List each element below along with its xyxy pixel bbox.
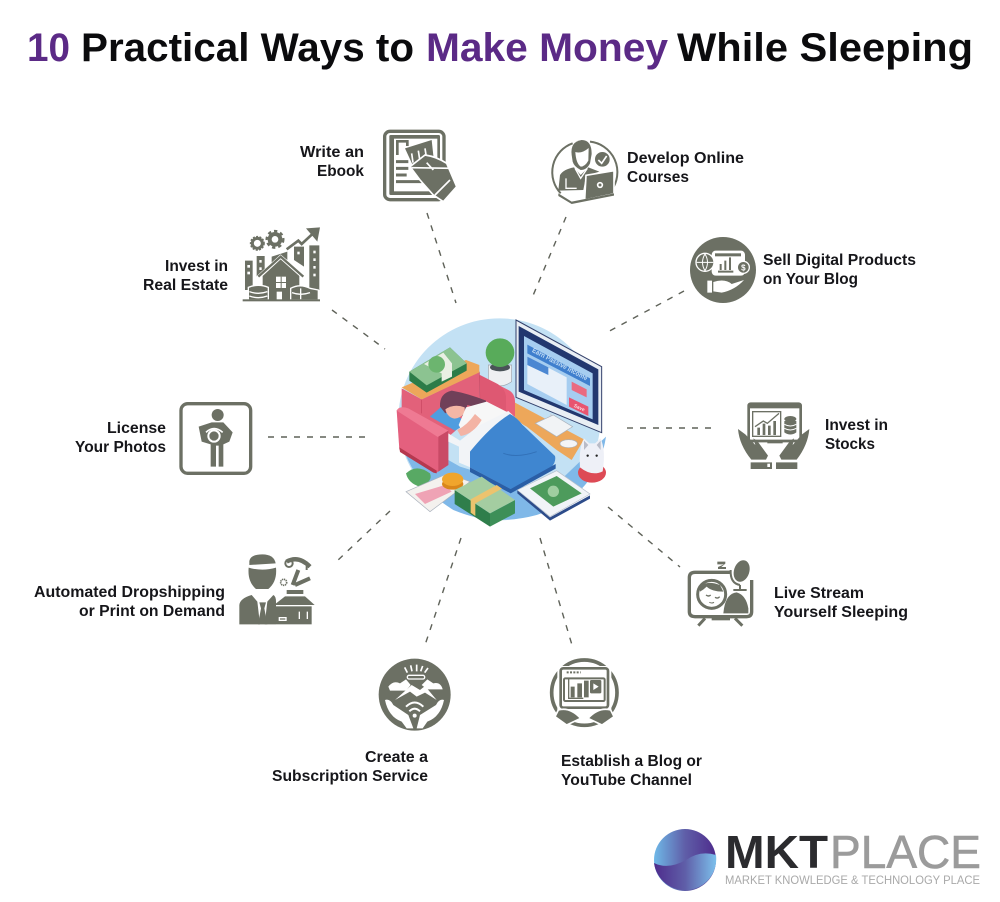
title: 10 xyxy=(27,26,70,70)
logo: MKTPLACE: PLACE xyxy=(830,826,981,878)
label: create a subscription service: Create a xyxy=(365,749,428,766)
logo: MKTPLACE: MKT xyxy=(725,826,828,878)
connector: blog or youtube xyxy=(540,538,572,645)
icon: blog or youtube channel xyxy=(552,660,617,725)
label: live stream yourself sleeping: Live Stream xyxy=(774,585,864,602)
title: Practical Ways to xyxy=(81,26,414,70)
label: license your photos xyxy=(75,420,166,456)
label: automated dropshipping: Automated Dropshipping xyxy=(34,584,225,601)
label: develop online courses: Develop Online xyxy=(627,150,744,167)
label: invest in real estate: Real Estate xyxy=(143,277,228,294)
potted plant xyxy=(486,338,514,386)
label: license your photos: License xyxy=(107,420,166,437)
icon: invest in stocks xyxy=(738,404,809,469)
label: invest in stocks: Invest in xyxy=(825,417,888,434)
label: blog or youtube channel: YouTube Channel xyxy=(561,772,692,789)
label: invest in stocks: Stocks xyxy=(825,436,875,453)
icon: automated dropshipping xyxy=(239,554,315,624)
label: invest in real estate: Invest in xyxy=(165,258,228,275)
connector: automated dropshipping xyxy=(337,511,390,561)
logo: MKTPLACE xyxy=(654,826,981,891)
connector: invest in stocks xyxy=(627,427,718,429)
label: live stream yourself sleeping xyxy=(774,585,908,621)
icon: invest in real estate xyxy=(243,227,320,302)
title xyxy=(27,26,973,70)
icon: develop online courses xyxy=(552,140,617,204)
connector: live stream xyxy=(608,507,680,567)
computer monitor xyxy=(516,320,602,433)
label: sell digital products xyxy=(763,252,916,288)
tablet with banknote xyxy=(517,471,590,521)
label: write an ebook xyxy=(300,144,364,180)
connector: write an ebook xyxy=(427,213,456,303)
icon: sell digital products xyxy=(690,237,756,303)
connector: develop online courses xyxy=(532,217,566,298)
icon: license your photos xyxy=(181,404,251,473)
icon: write an ebook xyxy=(385,131,457,202)
logo: MKTPLACE: MARKET KNOWLEDGE & TECHNOLOGY PLACE xyxy=(725,873,980,887)
white cat on red cushion xyxy=(578,438,606,483)
white sheet and blue blanket xyxy=(448,411,556,493)
title: Make Money xyxy=(426,26,669,70)
coins and notes on floor xyxy=(406,468,470,512)
label: sell digital products: Sell Digital Products xyxy=(763,252,916,269)
connector: subscription service xyxy=(425,538,461,645)
pink sofa xyxy=(397,360,515,473)
label: automated dropshipping xyxy=(34,584,225,620)
label: license your photos: Your Photos xyxy=(75,439,166,456)
connector: license your photos xyxy=(268,436,371,438)
label: invest in real estate xyxy=(143,258,228,294)
keyboard and mouse xyxy=(535,415,577,448)
label: write an ebook: Ebook xyxy=(317,163,364,180)
label: live stream yourself sleeping: Yourself Sleeping xyxy=(774,604,908,621)
desk xyxy=(515,403,584,460)
house xyxy=(257,254,305,302)
label: sell digital products: on Your Blog xyxy=(763,271,858,288)
sleeping person with pillow and hair xyxy=(430,391,508,436)
label: blog or youtube channel: Establish a Blog or xyxy=(561,753,702,770)
connector: invest in real estate xyxy=(332,310,385,349)
icon: live stream yourself sleeping xyxy=(689,558,752,626)
money stack on shelf xyxy=(409,347,467,393)
label: create a subscription service xyxy=(272,749,428,785)
label: invest in stocks xyxy=(825,417,888,453)
icon: sell digital products: $ xyxy=(741,263,746,272)
label: automated dropshipping: or Print on Demand xyxy=(79,603,225,620)
banded money stack xyxy=(455,477,515,527)
rising arrow xyxy=(287,231,316,249)
label: develop online courses: Courses xyxy=(627,169,689,186)
central illustration: person sleeping beside computer and money xyxy=(397,318,606,527)
label: create a subscription service: Subscription Service xyxy=(272,768,428,785)
gears xyxy=(251,231,283,250)
computer monitor: Earn Passive Income xyxy=(531,347,589,382)
icon: create a subscription service xyxy=(379,659,451,731)
logo globe xyxy=(654,829,716,891)
computer monitor: Save xyxy=(572,403,586,413)
background circle xyxy=(398,318,600,520)
connector: sell digital products xyxy=(604,291,684,334)
label: blog or youtube channel xyxy=(561,753,702,789)
label: write an ebook: Write an xyxy=(300,144,364,161)
title: While Sleeping xyxy=(677,26,973,70)
label: develop online courses xyxy=(627,150,744,186)
coin stacks xyxy=(248,285,318,300)
